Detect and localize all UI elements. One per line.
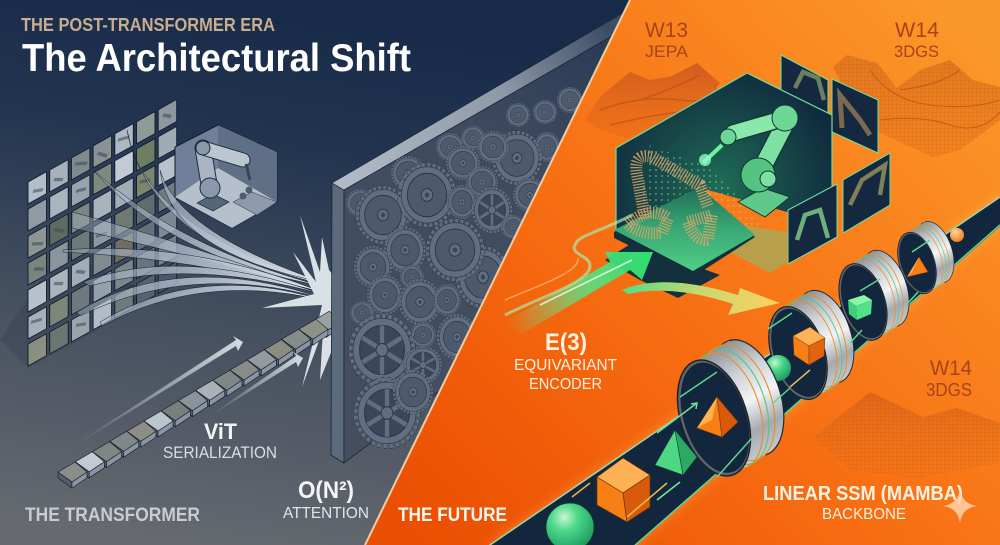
tube ring third (838, 250, 910, 341)
right panel: the future (366, 0, 1000, 545)
curved output arrow (622, 282, 780, 315)
tube object: green cube (848, 295, 872, 320)
tube object: orange pyramid (697, 397, 738, 437)
label: linear ssm backbone: LINEAR SSM (MAMBA) (763, 483, 963, 505)
isometric robot cell (175, 125, 277, 228)
patch token strip (58, 311, 341, 488)
tube object: green pyramid (655, 430, 697, 475)
icon: sparkle (943, 489, 977, 523)
green base plate (605, 243, 720, 298)
terrain: W14 lower (813, 392, 1000, 478)
serialization arrows (77, 336, 303, 444)
label: linear ssm backbone (764, 485, 962, 519)
label: W14 3DGS lower: W14 (930, 357, 972, 380)
gears on the wall (347, 88, 582, 445)
tube ring far (897, 221, 954, 294)
title block (21, 15, 411, 80)
view panels behind cell (781, 55, 878, 153)
label: equivariant encoder: EQUIVARIANT (514, 357, 617, 374)
tube object: far sphere (950, 228, 964, 242)
eyebrow: THE POST-TRANSFORMER ERA (21, 15, 275, 35)
mamba tube backbone (487, 193, 1000, 545)
label: W13 JEPA: JEPA (645, 42, 689, 61)
label: W14 3DGS lower: 3DGS (926, 380, 972, 400)
tube ring second (768, 290, 854, 400)
impact burst (262, 215, 334, 387)
label: W14 3DGS lower (926, 360, 972, 396)
terrain: W13 (585, 63, 720, 140)
label: the future: THE FUTURE (398, 505, 507, 526)
label: W13 JEPA: W13 (645, 19, 688, 42)
label: vit serialization: ViT (204, 419, 238, 444)
tube object: small pyramid (907, 257, 928, 277)
green robot arm (699, 105, 798, 217)
tube object: green sphere mid (765, 355, 791, 381)
terrain: W14 upper (833, 55, 1000, 157)
translucent light beam (731, 226, 787, 273)
label: equivariant encoder: E(3) (545, 329, 587, 356)
label: attention complexity (283, 477, 369, 522)
encoder input arrow (500, 215, 653, 335)
image patch grid (28, 99, 177, 366)
label: equivariant encoder (515, 332, 617, 389)
label: W13 JEPA (645, 22, 688, 57)
tube flow arrows (572, 370, 810, 517)
3D reconstruction cell (605, 73, 832, 298)
label: attention complexity: O(N²) (298, 477, 354, 504)
label: vit serialization (163, 419, 277, 462)
view panels in front of cell (788, 153, 890, 264)
converging attention streaks (63, 130, 322, 326)
label: W14 3DGS upper: W14 (895, 19, 939, 42)
orange point-cloud robot (628, 156, 712, 240)
label: the transformer: THE TRANSFORMER (25, 504, 200, 526)
point sheet (643, 145, 759, 225)
tube ring near (676, 339, 784, 477)
label: W14 3DGS upper (894, 22, 938, 57)
label: W14 3DGS upper: 3DGS (894, 42, 939, 61)
diagonal divider (365, 0, 630, 545)
tube object: large orange cube (597, 458, 650, 522)
tube rails (680, 240, 930, 477)
left panel: the transformer (0, 13, 622, 545)
label: equivariant encoder: ENCODER (529, 376, 602, 393)
label: linear ssm backbone: BACKBONE (822, 506, 906, 523)
label: vit serialization: SERIALIZATION (163, 444, 277, 462)
main heading: The Architectural Shift (22, 37, 411, 80)
gear wall (331, 10, 640, 463)
tube object: large green sphere (546, 503, 594, 545)
label: attention complexity: ATTENTION (283, 505, 369, 522)
tube object: orange cube (793, 327, 825, 365)
